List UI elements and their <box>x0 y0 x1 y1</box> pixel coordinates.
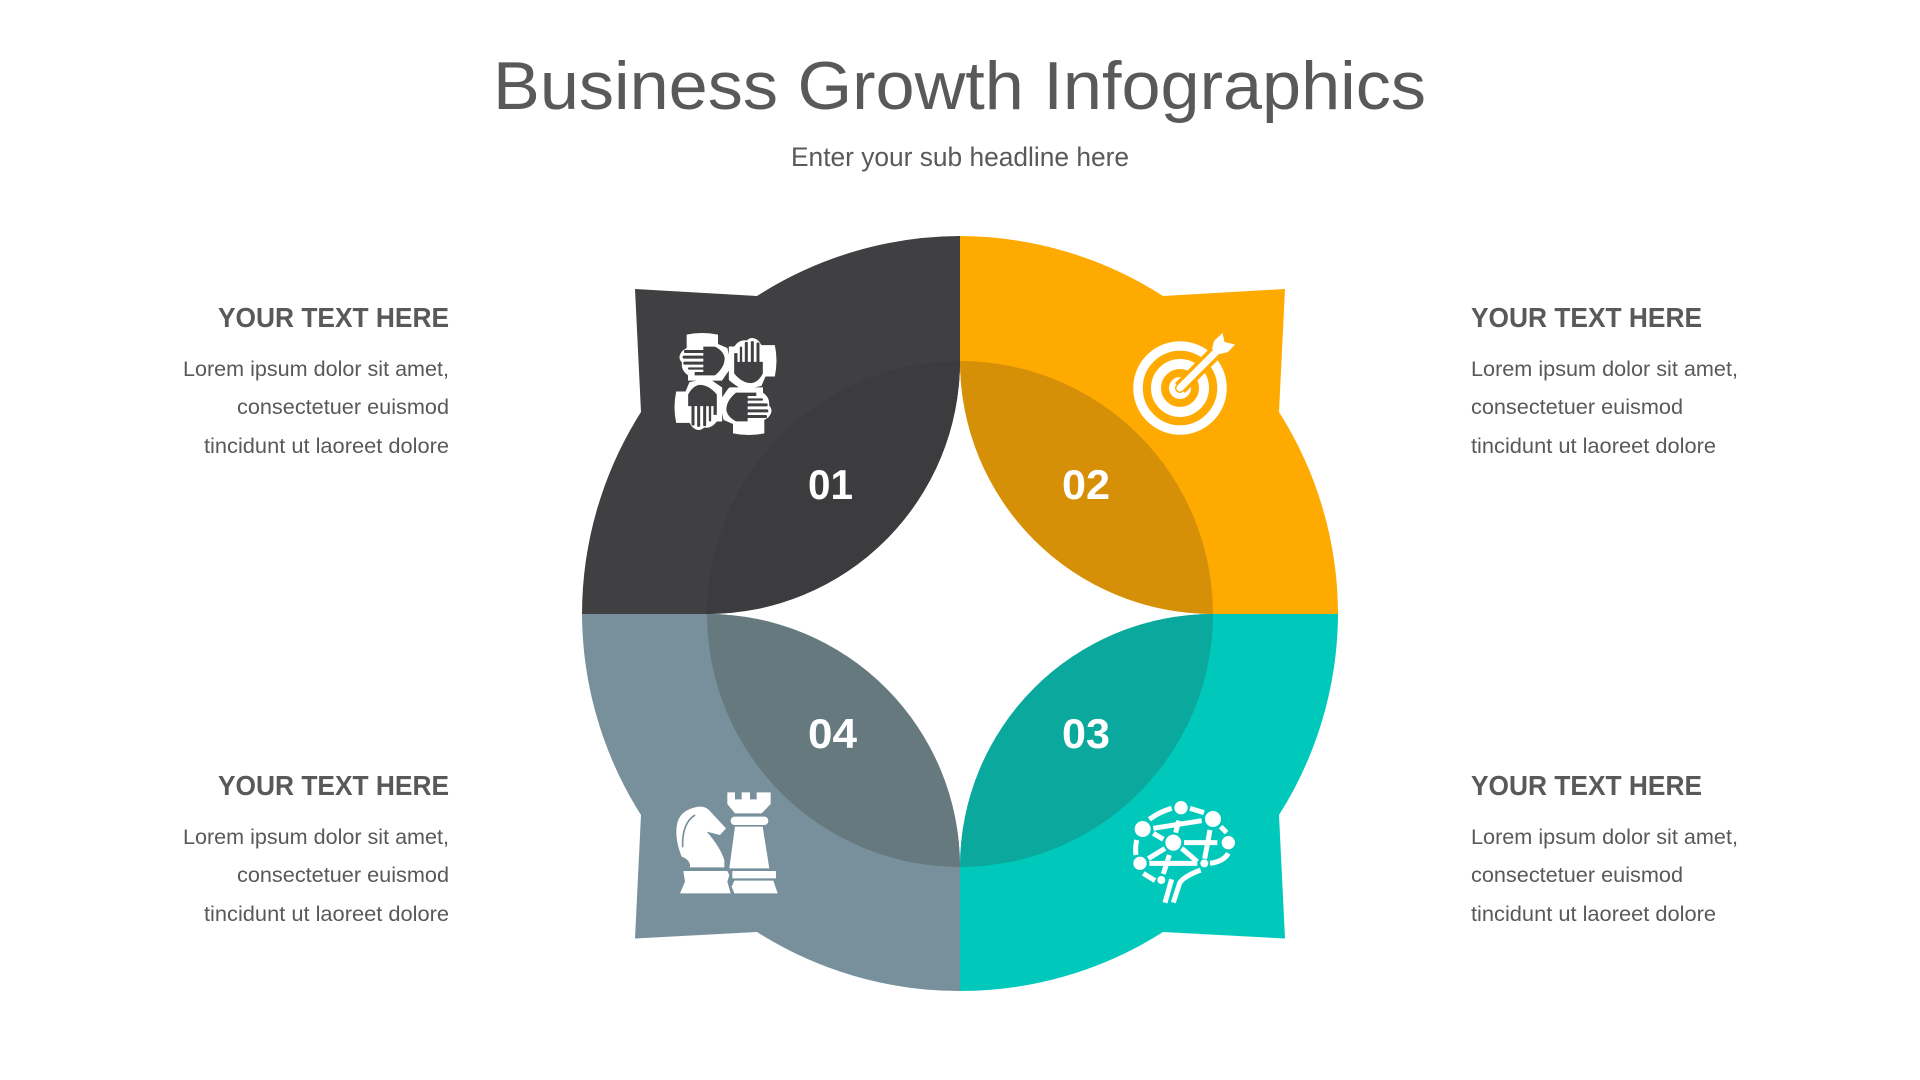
text block: top left: YOUR TEXT HERE <box>218 302 449 333</box>
text block: top right <box>1471 302 1738 458</box>
panel: segment 02 orange: 02 <box>1062 461 1110 508</box>
icon: brain network <box>1133 801 1235 903</box>
text block: bottom left: tincidunt ut laoreet dolore <box>204 903 449 926</box>
text block: bottom left <box>183 770 449 926</box>
text block: top right: tincidunt ut laoreet dolore <box>1471 435 1716 458</box>
title: Business Growth Infographics <box>493 48 1426 124</box>
text block: bottom right: consectetuer euismod <box>1471 864 1683 887</box>
text block: bottom right: YOUR TEXT HERE <box>1471 770 1702 801</box>
icon: four hands <box>674 333 776 435</box>
panel: segment 01 dark <box>582 236 960 614</box>
text block: bottom left: Lorem ipsum dolor sit amet, <box>183 826 449 849</box>
panel: segment 03 teal <box>960 614 1338 991</box>
icon: target with arrow <box>1138 333 1235 430</box>
text block: top left <box>183 302 449 458</box>
text block: bottom left: YOUR TEXT HERE <box>218 770 449 801</box>
text block: top left: Lorem ipsum dolor sit amet, <box>183 358 449 381</box>
panel: segment 04 slate <box>582 614 960 991</box>
text block: top right: Lorem ipsum dolor sit amet, <box>1471 358 1738 381</box>
panel: segment 04 slate: 04 <box>808 710 858 757</box>
text block: bottom right: Lorem ipsum dolor sit amet, <box>1471 826 1738 849</box>
text block: bottom right: tincidunt ut laoreet dolore <box>1471 903 1716 926</box>
panel: segment 02 orange <box>960 236 1338 614</box>
text block: top left: consectetuer euismod <box>237 396 449 419</box>
text block: top right: YOUR TEXT HERE <box>1471 302 1702 333</box>
panel: segment 01 dark: 01 <box>808 461 853 508</box>
text block: top left: tincidunt ut laoreet dolore <box>204 435 449 458</box>
subtitle: Enter your sub headline here <box>791 142 1129 172</box>
icon: chess knight and rook <box>676 792 778 893</box>
text block: bottom right <box>1471 770 1738 926</box>
text block: top right: consectetuer euismod <box>1471 396 1683 419</box>
text block: bottom left: consectetuer euismod <box>237 864 449 887</box>
panel: segment 03 teal: 03 <box>1062 710 1110 757</box>
